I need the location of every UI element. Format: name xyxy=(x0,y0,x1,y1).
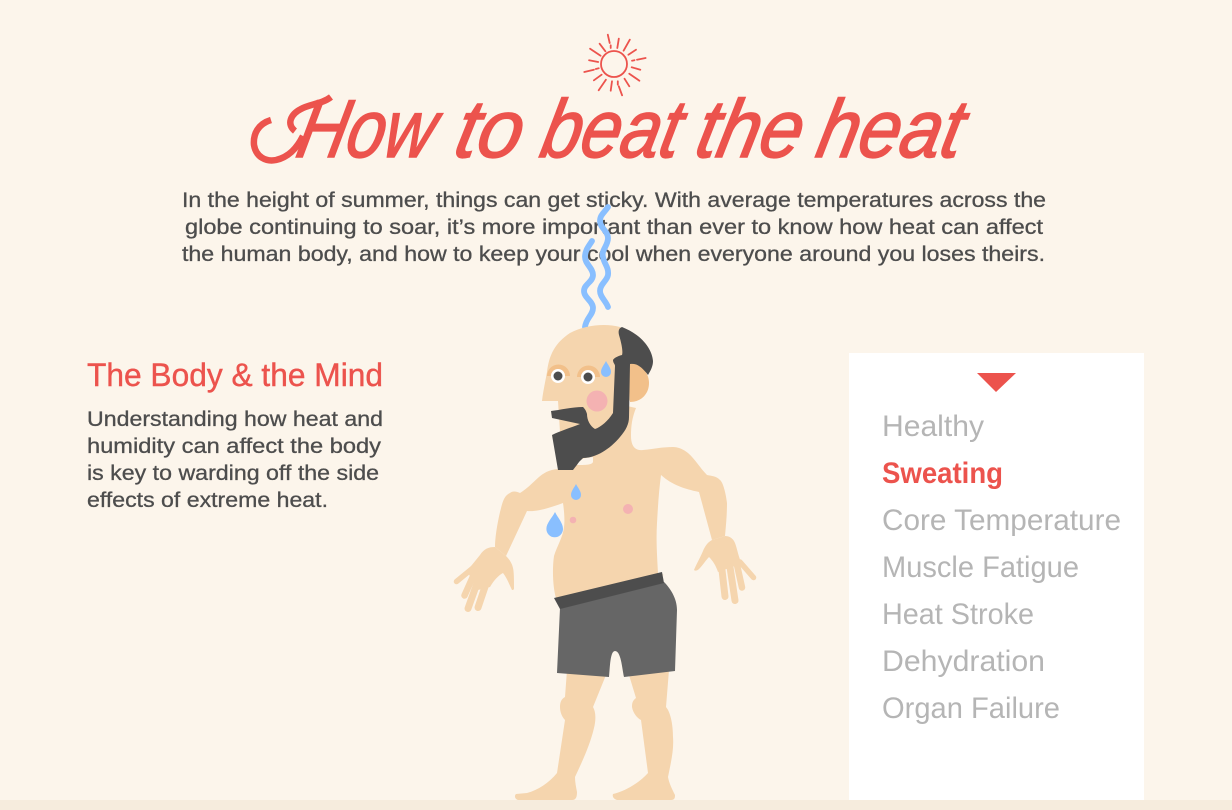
body text: understanding heat: humidity can affect the body xyxy=(87,435,382,458)
body text: understanding heat: effects of extreme heat. xyxy=(87,489,328,512)
waistband xyxy=(554,572,664,609)
nipples xyxy=(570,504,633,523)
list items: Core Temperature xyxy=(882,504,1121,537)
title: to xyxy=(448,83,534,175)
marker triangle xyxy=(977,373,1016,392)
body text: understanding heat: Understanding how heat and xyxy=(87,408,383,431)
eyes xyxy=(551,369,595,384)
list items: Sweating xyxy=(882,457,1003,490)
icon: sun xyxy=(584,35,646,95)
sweat drops xyxy=(546,361,611,537)
body text: understanding heat: is key to warding off the side xyxy=(87,462,379,485)
neck gap xyxy=(577,457,593,465)
brows xyxy=(547,364,600,377)
intro text: globe continuing to soar, it’s more important than ever to know how heat can affect xyxy=(185,216,1043,239)
title: beat xyxy=(534,83,694,175)
ear xyxy=(628,363,649,402)
beard xyxy=(551,327,653,470)
heat squiggles xyxy=(584,207,608,327)
list items xyxy=(882,410,1121,725)
list items: Healthy xyxy=(882,410,984,443)
title xyxy=(254,83,976,175)
hand: right xyxy=(694,536,754,600)
legs xyxy=(515,670,675,800)
body text: understanding heat xyxy=(87,408,383,512)
list items: Heat Stroke xyxy=(882,598,1034,631)
title: How xyxy=(290,83,450,175)
head xyxy=(542,325,635,440)
illustration: sweating man xyxy=(456,207,754,800)
heading: The Body & the Mind: The Body & the Mind xyxy=(87,357,383,393)
hand: left xyxy=(456,547,514,608)
cheek xyxy=(586,390,608,412)
list items: Dehydration xyxy=(882,645,1045,678)
intro text xyxy=(182,189,1046,266)
list items: Muscle Fatigue xyxy=(882,551,1079,584)
intro text: In the height of summer, things can get sticky. With average temperatures across the xyxy=(182,189,1046,212)
title: heat xyxy=(810,83,976,175)
shorts xyxy=(557,582,677,677)
intro text: the human body, and how to keep your cool when everyone around you loses theirs. xyxy=(182,243,1045,266)
list items: Organ Failure xyxy=(882,692,1060,725)
body xyxy=(495,400,727,598)
panel: symptom list xyxy=(849,353,1144,800)
title: the xyxy=(689,83,814,175)
